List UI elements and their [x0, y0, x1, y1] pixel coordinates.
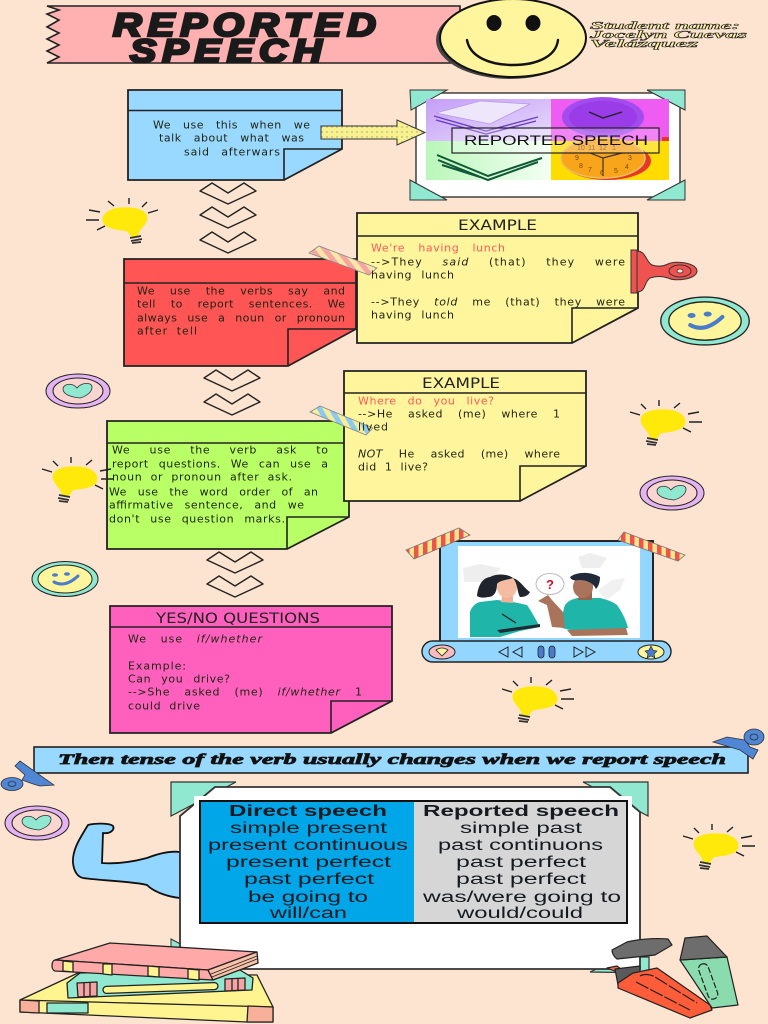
icon: bulb bottom right	[683, 824, 755, 869]
panel: pink note	[110, 606, 392, 733]
panel: yellow example note 2	[310, 371, 586, 501]
note text: talk about what was	[159, 132, 304, 144]
arrow	[321, 120, 425, 145]
example text: Where do you live?	[358, 394, 494, 408]
icon: smiley face	[436, 0, 586, 79]
panel: picture frame reported speech: 10	[577, 145, 585, 152]
table: direct vs reported speech: Reported speech	[423, 803, 619, 820]
title banner	[47, 6, 460, 69]
example text: -->They told me (that) they were	[371, 296, 625, 308]
picture label: REPORTED SPEECH	[464, 133, 648, 148]
table: direct vs reported speech: past perfect	[244, 871, 375, 888]
example text: having lunch	[371, 268, 454, 282]
icon: heart badge right	[640, 476, 704, 510]
panel: picture frame reported speech	[410, 90, 685, 200]
note text	[137, 284, 345, 338]
note text: noun or pronoun after ask.	[112, 470, 292, 484]
panel: picture frame reported speech: 1	[612, 145, 616, 152]
icon: smile badge left	[32, 562, 98, 596]
tape: left striped	[406, 528, 470, 559]
example text: -->They said (that) they were	[371, 256, 625, 268]
note text: Example:	[128, 660, 186, 672]
icon: blue clip right	[713, 729, 764, 759]
heading: EXAMPLE	[458, 218, 537, 234]
title: SPEECH	[130, 33, 328, 69]
chevrons group 2	[204, 370, 260, 415]
tape: blue	[310, 406, 373, 435]
heading: YES/NO QUESTIONS	[155, 611, 320, 627]
icon: bulb top left	[86, 198, 158, 243]
note text: We use this when we	[153, 118, 310, 132]
note text: We use the verb ask to	[112, 444, 328, 456]
table: direct vs reported speech: simple past	[460, 820, 583, 837]
note text: report questions. We can use a	[112, 458, 328, 470]
note text: We use the verbs say and	[137, 284, 345, 298]
icon: red clip	[631, 250, 697, 293]
heading: EXAMPLE	[422, 376, 500, 392]
example text: did 1 live?	[358, 460, 428, 474]
note text	[109, 444, 328, 526]
table: direct vs reported speech: simple present	[230, 820, 388, 837]
icon: stack of books	[20, 943, 273, 1022]
panel: video player illustration	[406, 528, 685, 662]
example text: We're having lunch	[371, 242, 505, 254]
note text: always use a noun or pronoun	[137, 312, 345, 324]
note text: affirmative sentence, and we	[109, 498, 304, 512]
note text: after tell	[137, 324, 197, 338]
banner: tense statement: Then tense of the verb usually changes when we report speech	[58, 752, 726, 768]
panel: table frame	[171, 782, 649, 973]
table: direct vs reported speech: past perfect	[456, 871, 587, 888]
icon: bulb center	[502, 677, 574, 722]
icon: heart badge bottom left	[5, 806, 69, 840]
panel: picture frame reported speech: 9	[575, 155, 579, 162]
note text: don't use question marks.	[109, 512, 285, 526]
example text	[371, 242, 625, 322]
icon: smile badge right	[661, 297, 749, 345]
panel: blue note	[128, 90, 342, 180]
example text: -->He asked (me) where 1	[358, 408, 560, 420]
title: REPORTED	[113, 7, 382, 43]
panel: yellow example note 1	[309, 213, 638, 343]
icon: heart badge left	[46, 374, 110, 408]
example text: lived	[358, 420, 388, 434]
example text	[358, 394, 560, 474]
note text: Can you drive?	[128, 672, 230, 686]
example text: having lunch	[371, 308, 454, 322]
student name	[588, 20, 747, 50]
table: direct vs reported speech: past perfect	[456, 854, 587, 871]
panel: green note	[107, 421, 349, 549]
illustration: two people talking	[463, 553, 628, 637]
table: direct vs reported speech: be going to	[248, 889, 368, 906]
table: direct vs reported speech: past continuons	[438, 837, 603, 854]
panel: picture frame reported speech: 8	[579, 163, 583, 170]
note text	[153, 118, 310, 158]
note text: could drive	[128, 700, 200, 712]
student name: Jocelyn Cuevas	[588, 29, 747, 41]
table: direct vs reported speech: was/were going to	[421, 889, 621, 906]
tape: right striped	[618, 532, 685, 561]
table: direct vs reported speech: would/could	[455, 905, 583, 922]
table: direct vs reported speech: will/can	[268, 905, 347, 922]
note text	[128, 632, 362, 712]
student name: Velázquez	[590, 38, 700, 50]
panel: picture frame reported speech: 6	[600, 170, 604, 177]
note text: We use if/whether	[128, 632, 263, 646]
example text: NOT He asked (me) where	[358, 448, 560, 460]
table: direct vs reported speech: present perfect	[226, 854, 392, 871]
panel: red note	[124, 259, 356, 366]
table: direct vs reported speech: present continuous	[208, 837, 408, 854]
icon: bulb right	[630, 400, 702, 445]
video control bar	[422, 641, 671, 662]
panel: picture frame reported speech: 12	[599, 145, 607, 152]
panel: picture frame reported speech: 5	[614, 168, 618, 175]
student name: Student name:	[590, 20, 740, 32]
table: direct vs reported speech	[200, 801, 627, 923]
note text: said afterwars	[184, 146, 280, 158]
panel: picture frame reported speech: 4	[625, 164, 629, 171]
banner: tense statement	[34, 747, 748, 773]
table: direct vs reported speech: Direct speech	[229, 803, 387, 820]
note text: -->She asked (me) if/whether 1	[128, 686, 362, 698]
note text: tell to report sentences. We	[137, 298, 345, 310]
panel: picture frame reported speech: 7	[588, 167, 592, 174]
title	[113, 7, 382, 69]
icon: bulb left	[42, 457, 114, 502]
chevrons group 1	[200, 183, 256, 253]
tape: pink	[309, 246, 377, 275]
illustration: two people talking: ?	[546, 577, 554, 592]
panel: picture frame reported speech: 11	[588, 145, 595, 152]
icon: highlighters	[607, 936, 738, 1018]
icon: flexed arm	[73, 824, 180, 898]
icon: blue clip left	[1, 761, 54, 790]
note text: We use the word order of an	[109, 486, 318, 498]
chevrons group 3	[207, 552, 263, 597]
panel: picture frame reported speech: 3	[628, 155, 632, 162]
